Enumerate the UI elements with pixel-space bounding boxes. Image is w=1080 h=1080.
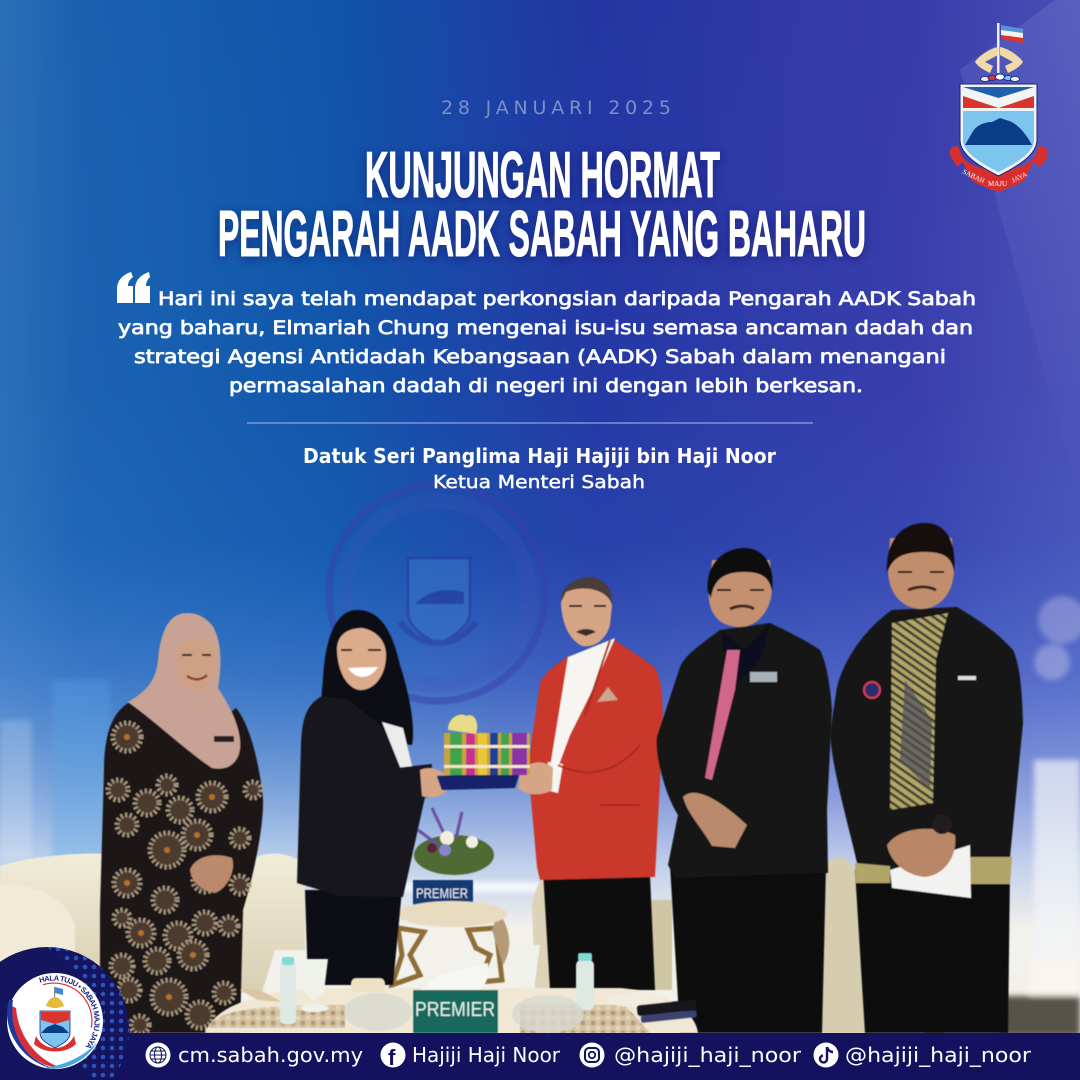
icon: tiktok bbox=[814, 1042, 838, 1068]
icon: Sabah coat of arms: MAJU bbox=[988, 180, 1007, 188]
sofas bbox=[0, 854, 945, 1033]
website: cm.sabah.gov.my bbox=[178, 1043, 363, 1067]
attribution name: Datuk Seri Panglima Haji Hajiji bin Haji Noor bbox=[303, 444, 776, 468]
bottom table with items bbox=[205, 945, 698, 1033]
tiktok handle: @hajiji_haji_noor bbox=[845, 1043, 1032, 1067]
icon: quotation mark bbox=[117, 272, 150, 303]
quote text: Hari ini saya telah mendapat perkongsian daripada Pengarah AADK Sabah bbox=[158, 288, 976, 310]
icon: instagram bbox=[580, 1042, 604, 1068]
title bbox=[218, 138, 866, 270]
footer bar bbox=[0, 1033, 1080, 1080]
title: KUNJUNGAN HORMAT bbox=[365, 138, 720, 211]
gift box on tray bbox=[437, 715, 530, 790]
icon: facebook: f bbox=[388, 1045, 396, 1070]
footer links bbox=[146, 1042, 1032, 1070]
person: Chief Minister in red jacket bbox=[518, 577, 663, 990]
instagram handle: @hajiji_haji_noor bbox=[614, 1043, 802, 1067]
date: 28 JANUARI 2025 bbox=[441, 97, 671, 119]
icon: globe bbox=[146, 1042, 170, 1068]
flower arrangement and side table: PREMIER bbox=[416, 885, 468, 901]
person: woman in black suit bbox=[297, 610, 452, 985]
quote text: strategi Agensi Antidadah Kebangsaan (AADK) Sabah dalam menangani bbox=[134, 346, 946, 368]
person: woman in hijab bbox=[100, 613, 263, 1034]
quote text: yang baharu, Elmariah Chung mengenai isu-isu semasa ancaman dadah dan bbox=[118, 317, 973, 339]
person: man in black jacket and batik shirt bbox=[830, 523, 1023, 1033]
badge: Hala Tuju Sabah Maju Jaya: HALA TUJU • SABAH MAJU JAYA bbox=[39, 976, 100, 1048]
background room: curtains, columns, floor bbox=[0, 680, 1080, 1036]
badge: Hala Tuju Sabah Maju Jaya bbox=[0, 947, 129, 1078]
icon: facebook bbox=[380, 1042, 406, 1070]
decorative flowers at right edge bbox=[1034, 596, 1080, 680]
attribution role: Ketua Menteri Sabah bbox=[433, 472, 645, 493]
quote text bbox=[118, 288, 976, 397]
flower arrangement and side table bbox=[392, 808, 509, 985]
bottom table with items: PREMIER bbox=[415, 999, 495, 1021]
person: man in black suit with pink tie bbox=[657, 548, 832, 1033]
background crest emblem on wall bbox=[329, 485, 545, 701]
badge crest bbox=[34, 987, 76, 1052]
facebook name: Hajiji Haji Noor bbox=[412, 1043, 561, 1067]
quote text: permasalahan dadah di negeri ini dengan lebih berkesan. bbox=[229, 375, 863, 397]
icon: Sabah coat of arms bbox=[950, 23, 1048, 192]
dress floral pattern bbox=[108, 723, 261, 1034]
icon: Sabah coat of arms: JAYA bbox=[1010, 170, 1029, 185]
icon: Sabah coat of arms: SABAH bbox=[961, 168, 986, 185]
